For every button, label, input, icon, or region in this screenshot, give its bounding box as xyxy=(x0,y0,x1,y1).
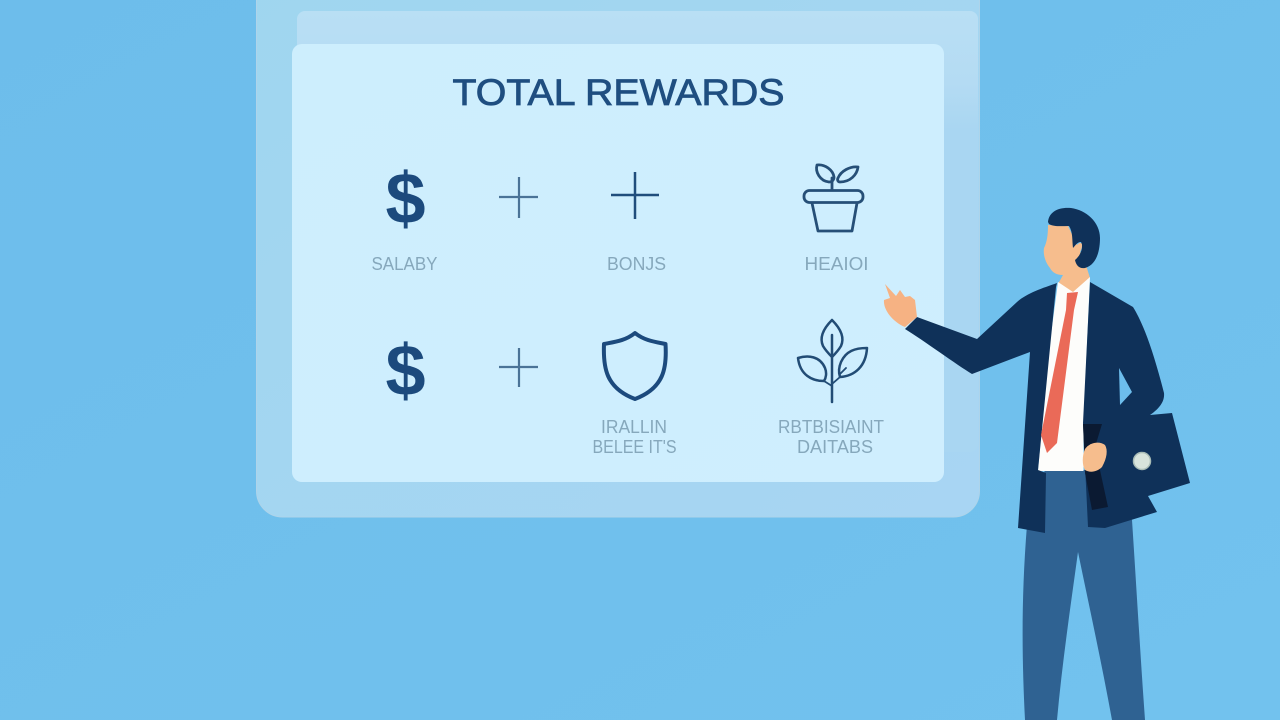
label: health benefits xyxy=(592,417,676,457)
icon: shield xyxy=(604,333,666,399)
tie xyxy=(1041,292,1078,453)
pointing hand xyxy=(884,284,917,327)
panel: middle sheet xyxy=(297,11,978,452)
jacket left xyxy=(905,283,1057,533)
figure: businessman xyxy=(884,208,1190,720)
shirt xyxy=(1038,277,1090,471)
label: health benefits: IRALLIN xyxy=(601,417,667,437)
label: retirement savings xyxy=(778,417,884,457)
panel: front card xyxy=(292,44,944,482)
hand on bag xyxy=(1083,443,1107,472)
ear xyxy=(1076,243,1082,256)
label: retirement savings: RBTBISIAINT xyxy=(778,417,884,437)
icon: sprout xyxy=(798,320,867,402)
label: retirement savings: DAITABS xyxy=(797,437,873,457)
label: health benefits: BELEE IT'S xyxy=(592,437,676,457)
strap xyxy=(1083,424,1108,510)
icon: plus large top xyxy=(611,172,659,219)
trousers xyxy=(1023,470,1145,720)
label: bonus: BONJS xyxy=(607,254,666,274)
jacket gap xyxy=(1119,368,1132,405)
face and neck xyxy=(1044,225,1090,296)
hair xyxy=(1048,208,1100,268)
bag clasp xyxy=(1134,452,1150,470)
panel: back board xyxy=(256,0,980,517)
title: TOTAL REWARDS xyxy=(452,72,784,113)
jacket right and bag xyxy=(1083,282,1190,528)
icon: dollar top: $ xyxy=(385,159,426,239)
icon: plus bottom xyxy=(499,348,538,387)
icon: plant pot xyxy=(804,165,863,231)
label: health: HEAIOI xyxy=(804,254,868,274)
icon: plus small top xyxy=(499,177,538,218)
icon: dollar bottom: $ xyxy=(385,331,426,411)
label: salary: SALABY xyxy=(372,254,438,274)
